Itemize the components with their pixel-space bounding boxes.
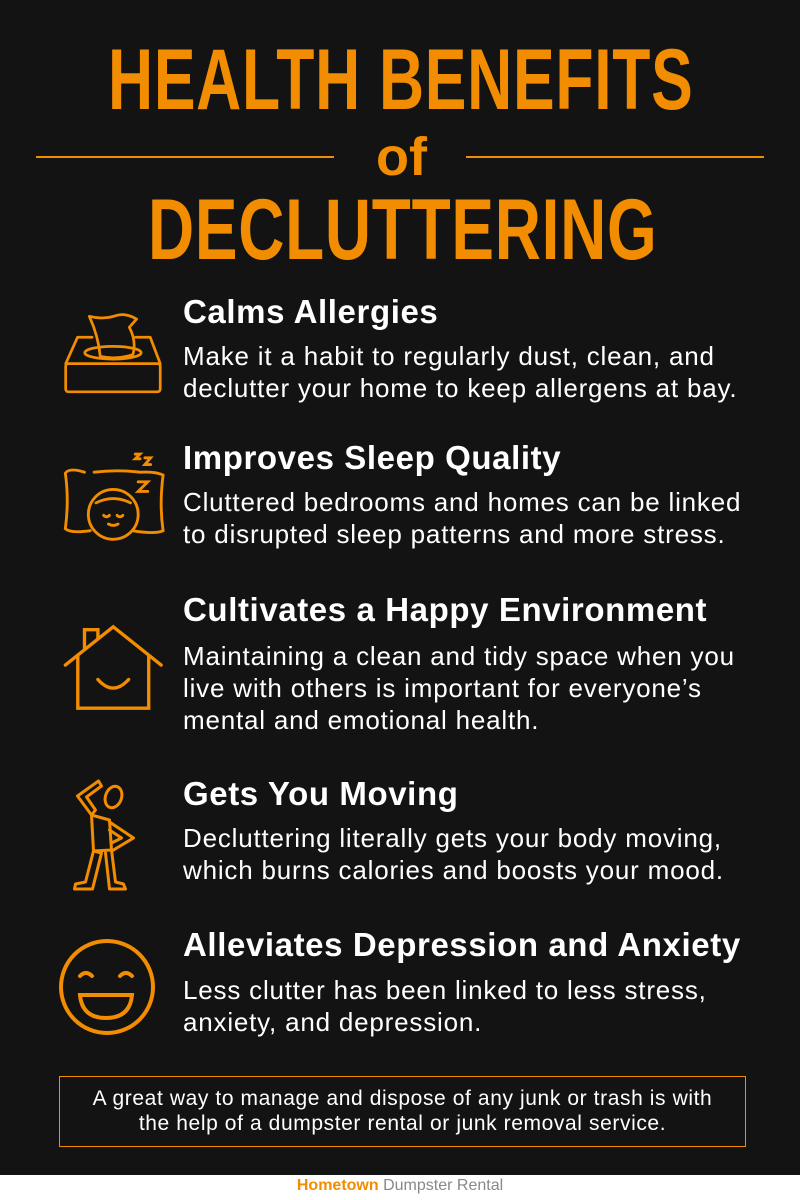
icon: laughing face [59, 939, 155, 1035]
callout box: the help of a dumpster rental or junk removal service. [139, 1112, 666, 1135]
footer logo: Hometown Dumpster Rental [297, 1177, 503, 1194]
text: moving: which burns calories and boosts your mood. [183, 855, 724, 885]
text: happy: Maintaining a clean and tidy space when you [183, 641, 735, 671]
callout box [59, 1076, 746, 1147]
title: HEALTH BENEFITS [108, 32, 694, 128]
text: depression: Less clutter has been linked to less stress, [183, 975, 707, 1005]
title: DECLUTTERING [148, 182, 657, 278]
heading: calms allergies: Calms Allergies [183, 293, 438, 330]
text: happy [183, 641, 735, 735]
title: of [376, 127, 427, 187]
icon: tissue box [64, 313, 162, 394]
text: depression: anxiety, and depression. [183, 1007, 482, 1037]
icon: happy house [64, 624, 163, 710]
heading: depression: Alleviates Depression and Anxiety [183, 926, 741, 963]
text: sleep: Cluttered bedrooms and homes can be linked [183, 487, 741, 517]
heading: happy: Cultivates a Happy Environment [183, 591, 707, 628]
text: happy: live with others is important for everyone’s [183, 673, 702, 703]
text: allergies: Make it a habit to regularly dust, clean, and [183, 341, 715, 371]
text: happy: mental and emotional health. [183, 705, 539, 735]
text: sleep: to disrupted sleep patterns and more stress. [183, 519, 725, 549]
heading: sleep: Improves Sleep Quality [183, 439, 561, 476]
text: moving [183, 823, 724, 885]
icon: sleeping face [64, 452, 165, 541]
heading: moving: Gets You Moving [183, 775, 458, 812]
text: sleep [183, 487, 741, 549]
text: moving: Decluttering literally gets your body moving, [183, 823, 722, 853]
icon: stretching person [73, 779, 136, 890]
title [36, 32, 764, 278]
text: allergies [183, 341, 737, 403]
text: depression [183, 975, 707, 1037]
text: allergies: declutter your home to keep allergens at bay. [183, 373, 737, 403]
callout box: A great way to manage and dispose of any junk or trash is with [93, 1087, 712, 1110]
